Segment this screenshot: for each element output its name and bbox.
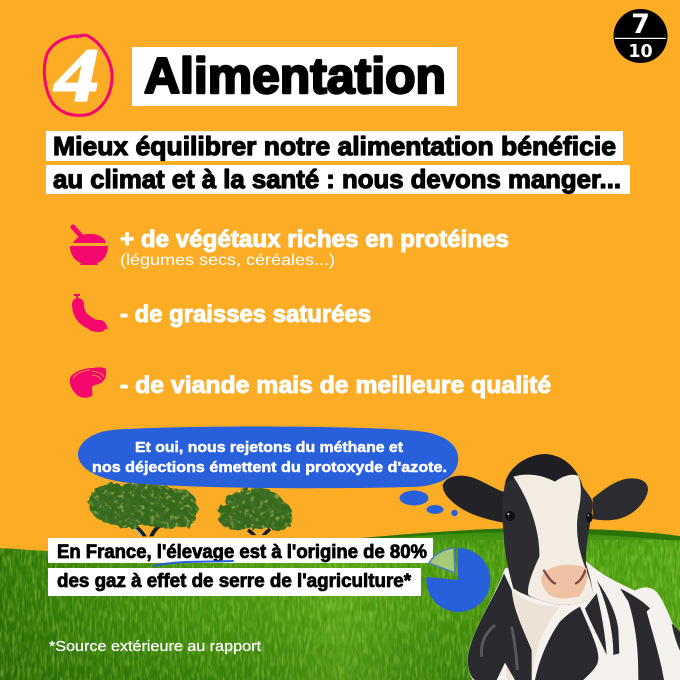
trees (89, 483, 293, 540)
progress badge 7/10: 10 (628, 42, 653, 62)
number 4 in hand-drawn circle: 4 (53, 34, 99, 118)
subtitle: Mieux équilibrer notre alimentation bénéficie (53, 131, 616, 161)
icon: sausage (74, 295, 107, 329)
fact about livestock: En France, l'élevage est à l'origine de 80% (57, 542, 427, 563)
cow neck shading (506, 590, 560, 680)
fact about livestock (48, 538, 433, 596)
cow shoulder highlights (481, 625, 517, 670)
cow white blaze (513, 475, 593, 605)
cow right ear (593, 478, 648, 520)
cow (443, 454, 680, 680)
cow head (502, 454, 593, 605)
icon: bowl (70, 227, 108, 265)
progress badge 7/10 (614, 9, 668, 63)
item 2: less saturated fats: - de graisses saturées (120, 301, 371, 328)
item 1: more plant proteins (120, 226, 509, 269)
cow muzzle (541, 565, 587, 598)
title: Alimentation (144, 48, 446, 104)
progress badge 7/10: 7 (631, 9, 650, 40)
fact about livestock: des gaz à effet de serre de l'agriculture* (57, 571, 412, 592)
cow eyes (505, 511, 515, 521)
source note: *Source extérieure au rapport (49, 639, 261, 655)
item 1: more plant proteins: + de végétaux riches en protéines (120, 226, 509, 253)
item 3: less meat, better quality: - de viande mais de meilleure qualité (120, 372, 551, 399)
subtitle: au climat et à la santé : nous devons manger... (53, 164, 621, 194)
green meadow (0, 520, 680, 680)
number 4 in hand-drawn circle (44, 34, 112, 118)
subtitle (46, 131, 630, 194)
speech bubble: nos déjections émettent du protoxyde d'azote. (92, 459, 447, 476)
cow left ear (443, 476, 504, 523)
speech bubble (78, 426, 458, 516)
item 1: more plant proteins: (légumes secs, céréales...) (120, 252, 335, 269)
icon: meat (70, 367, 106, 398)
cow dark patches (468, 573, 680, 680)
cow body (467, 562, 680, 680)
speech bubble: Et oui, nous rejetons du méthane et (135, 439, 403, 456)
pie chart 80% (426, 548, 490, 612)
